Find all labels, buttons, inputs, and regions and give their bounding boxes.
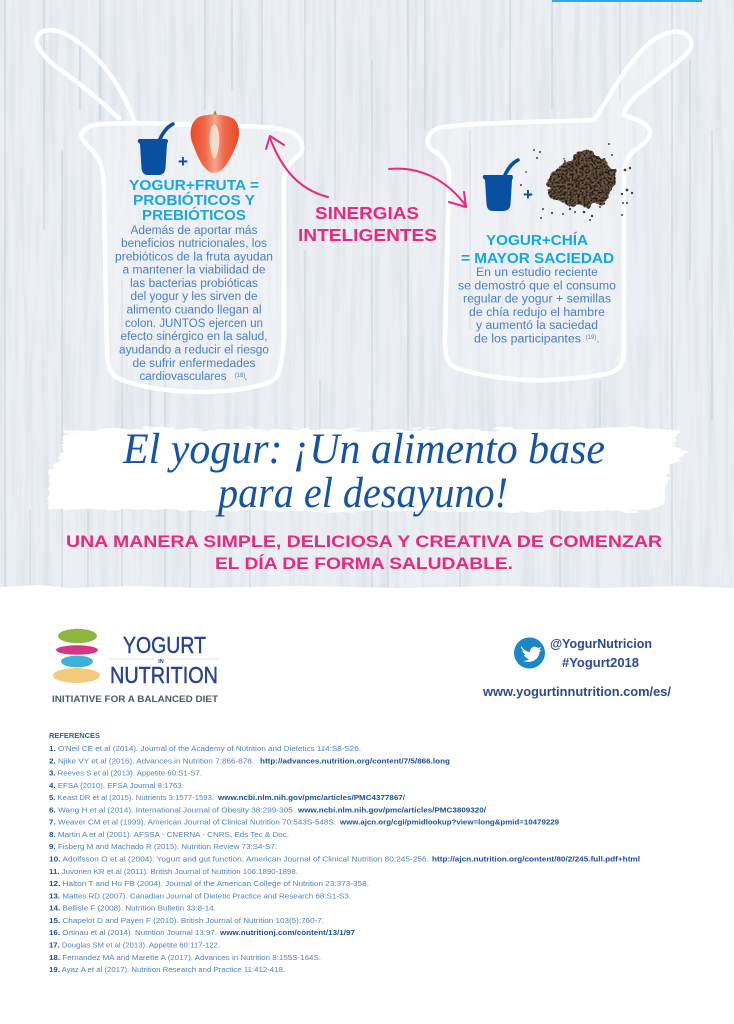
text block: chia description: de los participantes	[474, 334, 581, 346]
text block: fruta description: alimento cuando llegan al	[126, 304, 262, 316]
plus sign right: +	[523, 185, 533, 204]
website: www.yogurtinnutrition.com/es/	[482, 684, 671, 699]
logo: yogurt in nutrition	[52, 629, 218, 705]
text block: chia description: regular de yogur + semillas	[463, 294, 611, 306]
references: 1. O'Neil CE et al (2014). Journal of the Academy of Nutrition and Dietetics 114:S8-S26.	[49, 744, 361, 753]
references: 5. Keast DR et al (2015). Nutrients 3:1577-1593.	[49, 793, 214, 802]
heading: yogur+fruta	[129, 178, 259, 224]
subtitle: UNA MANERA SIMPLE, DELICIOSA Y CREATIVA DE COMENZAR	[66, 533, 662, 551]
references: 19. Ayaz A et al (2017). Nutrition Research and Practice 11:412-418.	[49, 965, 285, 974]
cup outline left	[37, 30, 302, 392]
text block: fruta description: ayudando a reducir el riesgo	[119, 344, 269, 356]
references: 10. Adolfsson O et al (2004). Yogurt and gut function. American Journal of Clinical Nutrition 80:245-256.	[49, 854, 429, 864]
text block: fruta description: a mantener la viabilidad de	[122, 264, 266, 276]
references: 8. Martin A et al (2001). AFSSA - CNERNA - CNRS, Eds Tec & Doc.	[49, 830, 289, 839]
references: 9. Fisberg M and Machado R (2015). Nutrition Review 73:S4-S7.	[49, 842, 277, 851]
logo wordmark: YOGURT	[123, 632, 206, 658]
subtitle: EL DÍA DE FORMA SALUDABLE.	[215, 554, 513, 573]
text block: chia description	[458, 267, 616, 346]
icon: twitter bird	[514, 638, 545, 668]
references: 18. Fernandez MA and Marette A (2017). Advances in Nutrition 8:155S-164S.	[49, 953, 321, 962]
references heading: REFERENCES	[49, 731, 100, 740]
text block: fruta description: de sufrir enfermedades	[132, 358, 256, 370]
text block: fruta description: beneficios nutricionales, los	[121, 238, 267, 250]
text block: fruta description: prebióticos de la fruta ayudan	[115, 252, 273, 264]
icon: yogurt cup left	[138, 124, 173, 175]
logo wordmark	[110, 632, 218, 688]
references: www.ajcn.org/cgi/pmidlookup?view=long&pmid=10479229	[339, 818, 559, 827]
heading: yogur+chia: YOGUR+CHÍA	[486, 232, 588, 249]
cup outline right	[428, 32, 691, 380]
references: http://advances.nutrition.org/content/7/5/866.long	[260, 756, 450, 765]
text block: fruta description: Además de aportar más	[130, 225, 258, 237]
callout: sinergias inteligentes: INTELIGENTES	[298, 225, 437, 245]
logo icon: stacked blobs	[53, 629, 100, 683]
top blue bar fragment	[552, 0, 702, 2]
references: www.ncbi.nlm.nih.gov/pmc/articles/PMC4377867/	[217, 793, 406, 802]
text block: fruta description: las bacterias probióticas	[130, 278, 258, 290]
panel: yogur + chia cup	[428, 32, 691, 380]
title: el yogur: El yogur: ¡Un alimento base	[122, 426, 605, 473]
references: 6. Wang H et al (2014). International Journal of Obesity 38:299-305.	[49, 805, 295, 814]
references: 16. Ortinau et al (2014). Nutrition Journal 13:97.	[49, 928, 217, 937]
references: 15. Chapelot D and Payen F (2010). British Journal of Nutrition 103(5):760-7.	[49, 916, 324, 925]
arrow: to chia cup	[389, 169, 466, 207]
references: 2. Njike VY et al (2016). Advances in Nutrition 7:866-878.	[49, 756, 254, 765]
text block: fruta description: colon. JUNTOS ejercen un	[125, 318, 263, 330]
plus sign left: +	[178, 152, 188, 171]
icon: yogurt cup right	[483, 160, 518, 211]
icon: chia seeds	[520, 143, 633, 221]
heading: yogur+fruta: PREBIÓTICOS	[142, 206, 246, 224]
references: 7. Weaver CM et al (1999). American Journal of Clinical Nutrition 70:543S-548S.	[49, 818, 336, 827]
text block: chia description: y aumentó la saciedad	[476, 320, 598, 332]
references: 3. Reeves S et al (2013). Appetite 60:S1-S7.	[49, 769, 202, 778]
text block: fruta description: del yogur y les sirven de	[130, 291, 258, 303]
text block: fruta description: efecto sinérgico en la salud,	[120, 331, 268, 343]
references: 11. Juvonen KR et al (2011). British Journal of Nutrition 106:1890-1898.	[49, 867, 298, 876]
logo wordmark: NUTRITION	[110, 662, 218, 688]
torn page edge	[0, 585, 734, 1024]
heading: yogur+fruta: PROBIÓTICOS Y	[133, 191, 255, 209]
references: www.nutritionj.com/content/13/1/97	[219, 928, 355, 937]
brush band	[47, 428, 687, 511]
heading: yogur+chia	[461, 232, 614, 267]
panel: yogur + fruta cup	[37, 30, 302, 392]
references	[49, 731, 640, 974]
references: 14. Bellisle F (2008). Nutrition Bulletin 33:8-14.	[49, 904, 216, 913]
heading: yogur+chia: = MAYOR SACIEDAD	[461, 250, 614, 267]
title: el yogur: para el desayuno!	[215, 470, 508, 517]
logo tagline: INITIATIVE FOR A BALANCED DIET	[52, 694, 218, 705]
subtitle	[66, 533, 662, 573]
text block: fruta description: (18)	[235, 373, 245, 379]
text block: fruta description: .	[244, 371, 248, 383]
text block: chia description: se demostró que el consumo	[458, 280, 616, 292]
references: 13. Mattes RD (2007). Canadian Journal of Dietetic Practice and Research 68:S1-S3.	[49, 891, 351, 900]
background: white wood planks	[0, 0, 734, 590]
text block: fruta description: cardiovasculares	[140, 371, 227, 383]
text block: chia description: .	[596, 334, 600, 346]
references: 12. Halton T and Hu FB (2004). Journal of the American College of Nutrition 23:373-358.	[49, 879, 369, 888]
callout: sinergias inteligentes: SINERGIAS	[315, 203, 419, 223]
callout: sinergias inteligentes	[298, 203, 437, 245]
twitter handle: @YogurNutricion	[550, 637, 652, 651]
hashtag: #Yogurt2018	[562, 656, 639, 670]
logo wordmark: IN	[158, 659, 164, 665]
icon: strawberry	[191, 110, 239, 173]
text block: chia description: En un estudio reciente	[476, 267, 598, 279]
references: 17. Douglas SM et al (2013). Appetite 60:117-122.	[49, 940, 220, 950]
title: el yogur	[122, 426, 605, 517]
text block: chia description: de chía redujo el hambre	[469, 307, 605, 319]
heading: yogur+fruta: YOGUR+FRUTA =	[129, 178, 259, 194]
text block: fruta description	[115, 225, 273, 383]
references: www.ncbi.nlm.nih.gov/pmc/articles/PMC3809320/	[297, 805, 487, 814]
social: twitter	[482, 637, 671, 699]
references: http://ajcn.nutrition.org/content/80/2/245.full.pdf+html	[432, 854, 640, 864]
references: 4. EFSA (2010). EFSA Journal 8:1763.	[49, 781, 184, 790]
text block: chia description: (19)	[586, 335, 596, 341]
arrow: to fruta cup	[266, 136, 328, 197]
